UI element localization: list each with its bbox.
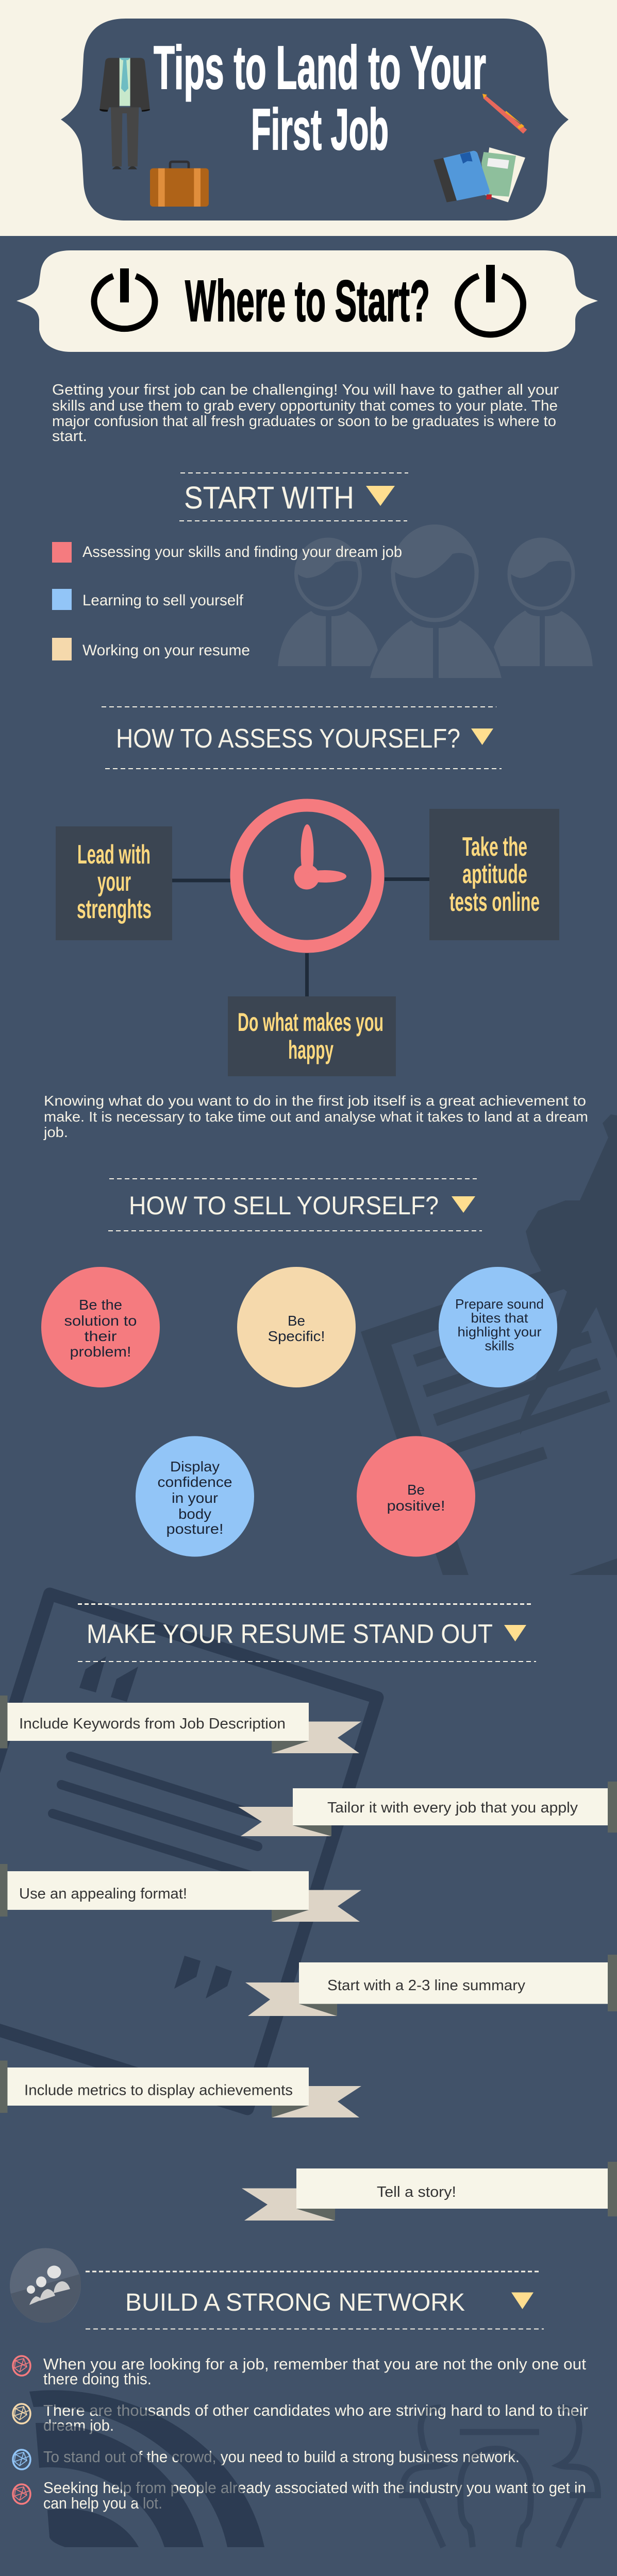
circle: sound bites: skills — [485, 1338, 514, 1353]
background: three people — [278, 524, 593, 678]
icon: triangle — [366, 486, 395, 506]
text block: knowing: Knowing what do you want to do in the first job itself is a great achievement to — [44, 1093, 586, 1109]
panel: build a strong network — [10, 2248, 588, 2512]
callout: lead with your strengths — [56, 826, 172, 940]
icon: triangle — [511, 2293, 533, 2309]
circle: be positive — [357, 1436, 475, 1557]
ribbon: format: Use an appealing format! — [19, 1886, 187, 1902]
bullet: thousands of candidates — [13, 2401, 588, 2434]
circle: display confidence — [136, 1436, 254, 1557]
heading: where to start: Where to Start? — [185, 268, 430, 333]
bullet: thousands of candidates: There are thousands of other candidates who are striving hard to land to their — [43, 2401, 588, 2419]
circle: sound bites: highlight your — [458, 1324, 542, 1340]
circle: sound bites: bites that — [471, 1310, 528, 1326]
callout: lead with your strengths: Lead with — [77, 840, 151, 870]
circle: display confidence: in your — [172, 1490, 218, 1506]
heading: resume: MAKE YOUR RESUME STAND OUT — [87, 1619, 493, 1649]
bullet: looking for a job: When you are looking for a job, remember that you are not the only one out — [43, 2355, 586, 2373]
heading: assess: HOW TO ASSESS YOURSELF? — [116, 724, 460, 754]
circle: be specific: Be — [288, 1313, 305, 1329]
bullet: looking for a job: there doing this. — [43, 2370, 152, 2388]
callout: do what makes you happy: happy — [288, 1036, 333, 1064]
background: clipboard and pen — [361, 1114, 617, 1575]
ribbon: summary — [245, 1955, 617, 2016]
bullet: seeking help: can help you a lot. — [43, 2494, 162, 2512]
callout: lead with your strengths: your — [97, 867, 131, 897]
list item: learning — [52, 589, 244, 610]
circle: be positive: positive! — [387, 1498, 445, 1514]
title: First Job — [251, 97, 389, 162]
icon: triangle — [471, 728, 493, 745]
icon: clock — [237, 805, 378, 946]
heading: start with: START WITH — [184, 480, 354, 515]
panel: where to start — [16, 250, 598, 352]
callout: aptitude tests — [429, 809, 559, 940]
callout: do what makes you happy — [228, 996, 396, 1076]
bullet: seeking help — [13, 2479, 586, 2512]
bullet: looking for a job — [13, 2355, 586, 2388]
background: wifi arcs — [29, 2390, 264, 2547]
bullet: thousands of candidates: dream job. — [43, 2416, 114, 2434]
heading: network: BUILD A STRONG NETWORK — [125, 2289, 465, 2316]
icon: pen — [482, 94, 527, 133]
icon: suit — [99, 58, 150, 170]
panel: title header — [61, 19, 569, 221]
circle: display confidence: Display — [170, 1459, 220, 1475]
callout: aptitude tests: tests online — [449, 887, 540, 917]
text block: introduction: Getting your first job can be challenging! You will have to gather all your — [52, 382, 559, 398]
title — [154, 33, 486, 162]
callout: do what makes you happy: Do what makes you — [238, 1008, 383, 1037]
circle: be the solution: their — [85, 1328, 116, 1344]
panel: start with — [52, 473, 593, 678]
text block: introduction — [52, 382, 559, 445]
ribbon: metrics — [0, 2061, 361, 2117]
icon: triangle — [504, 1625, 526, 1641]
icon: books — [433, 147, 525, 202]
icon: power right — [458, 265, 523, 334]
text block: introduction: major confusion that all fresh graduates or soon to be graduates is where to — [52, 413, 556, 430]
where to start banner shape — [16, 250, 598, 352]
circle: sound bites: Prepare sound — [455, 1296, 544, 1312]
circle: be the solution: Be the — [79, 1297, 122, 1313]
ribbon: keywords: Include Keywords from Job Description — [19, 1716, 286, 1732]
background: people outline — [402, 2408, 598, 2547]
text block: knowing: job. — [43, 1124, 68, 1140]
text block: knowing — [43, 1093, 588, 1140]
icon: power left — [94, 268, 155, 329]
circle: be the solution: solution to — [64, 1313, 137, 1329]
text block: introduction: skills and use them to grab every opportunity that comes to your plate. The — [52, 398, 558, 414]
title banner shape — [61, 19, 569, 221]
circle: sound bites — [439, 1267, 557, 1387]
icon: triangle — [452, 1196, 475, 1213]
ribbon: summary: Start with a 2-3 line summary — [327, 1977, 526, 1994]
circle: be the solution: problem! — [70, 1344, 131, 1360]
ribbon: tailor: Tailor it with every job that you apply — [327, 1800, 578, 1816]
circle: display confidence: posture! — [166, 1521, 224, 1537]
heading: sell: HOW TO SELL YOURSELF? — [129, 1191, 439, 1220]
bullet: seeking help: Seeking help from people already associated with the industry you want to get in — [43, 2479, 586, 2497]
ribbon: story — [242, 2162, 617, 2221]
list item: resume: Working on your resume — [82, 642, 250, 659]
list item: learning: Learning to sell yourself — [82, 592, 244, 609]
background: resume document — [0, 1594, 377, 2109]
ribbon: metrics: Include metrics to display achievements — [24, 2082, 293, 2099]
ribbon: format — [0, 1864, 361, 1922]
panel: make your resume stand out — [0, 1604, 617, 2221]
list item: assessing: Assessing your skills and finding your dream job — [82, 544, 402, 561]
callout: aptitude tests: aptitude — [462, 859, 527, 889]
bullet: stand out: To stand out of the crowd, you need to build a strong business network. — [43, 2448, 520, 2466]
ribbon: keywords — [0, 1696, 361, 1753]
circle: display confidence: body — [178, 1506, 211, 1522]
text block: introduction: start. — [52, 428, 87, 445]
icon: briefcase — [150, 162, 209, 207]
circle: be positive: Be — [407, 1482, 425, 1498]
circle: be specific — [237, 1267, 356, 1387]
circle: display confidence: confidence — [158, 1474, 232, 1490]
circle: be specific: Specific! — [268, 1328, 325, 1344]
circle: be the solution — [41, 1267, 160, 1387]
ribbon: story: Tell a story! — [377, 2184, 456, 2200]
callout: aptitude tests: Take the — [462, 832, 527, 862]
panel: how to sell yourself — [41, 1179, 557, 1557]
icon: network badge — [10, 2248, 81, 2323]
panel: how to assess yourself — [56, 707, 559, 1076]
callout: lead with your strengths: strenghts — [77, 894, 152, 924]
list item: resume — [52, 638, 250, 660]
text block: knowing: make. It is necessary to take time out and analyse what it takes to land at a dream — [44, 1109, 588, 1125]
ribbon: tailor — [238, 1782, 617, 1836]
